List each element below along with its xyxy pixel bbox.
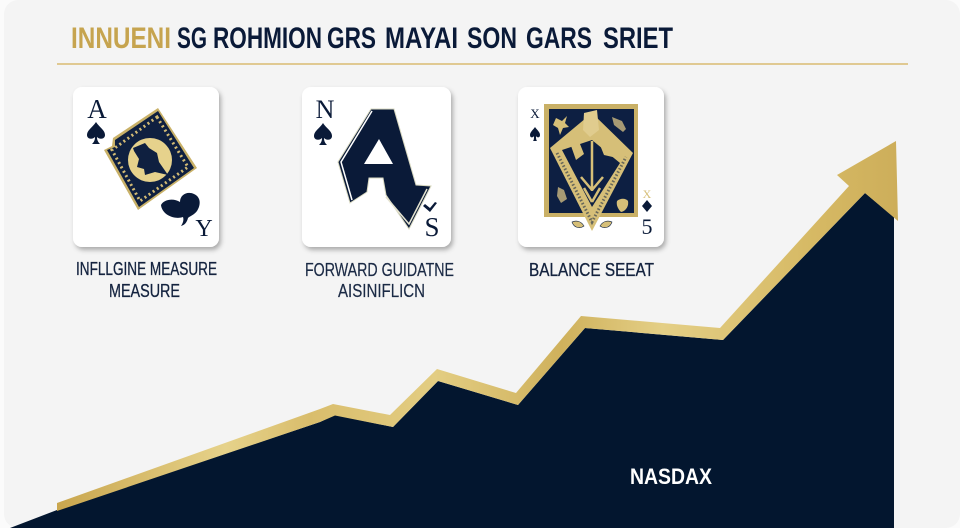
title: GRS	[327, 22, 376, 55]
title: GARS	[526, 22, 592, 55]
card 2 corner rank and spade	[314, 95, 335, 145]
card 1 corner rank and spade	[87, 94, 107, 144]
card 3 bottom corner rank and pip: X	[643, 187, 652, 201]
title: SON	[467, 22, 517, 55]
card 2 bottom rank: S	[424, 212, 440, 242]
card 3 crest emblem	[544, 104, 638, 231]
card 1 label: MEASURE	[109, 281, 180, 301]
NASDAX label: NASDAX	[630, 464, 712, 489]
card 2 label	[305, 260, 454, 301]
title: INNUENI	[71, 22, 171, 55]
title	[71, 22, 673, 55]
area chart: navy rising area	[10, 193, 894, 528]
card 2 large A emblem	[338, 109, 431, 229]
title: ROHMION	[213, 22, 322, 55]
card 1 tilted emblem	[104, 108, 197, 210]
title: MAYAI	[385, 22, 458, 55]
card 3 label: BALANCE SEEAT	[529, 260, 654, 280]
title: SG	[177, 22, 207, 55]
card 3 bottom corner rank and pip	[642, 187, 652, 239]
card 1: ace with tilted emblem	[73, 87, 219, 247]
chart arrow: gold rising line with arrowhead	[57, 141, 898, 511]
card 3 top corner rank and spade: X	[530, 106, 540, 121]
card 1 label	[76, 259, 217, 301]
card 2 bottom rank	[423, 202, 440, 242]
card 1 corner rank and spade: A	[87, 94, 107, 124]
card 2 corner rank and spade: N	[316, 95, 335, 124]
card 3: crest	[518, 87, 664, 247]
card 2: large letter A	[302, 87, 451, 247]
card 1 bottom spade blob and rank	[161, 193, 213, 242]
card 2 label: FORWARD GUIDATNE	[305, 260, 454, 280]
card 1 label: INFLLGINE MEASURE	[76, 259, 217, 279]
card 3 top corner rank and spade	[530, 106, 540, 141]
card 1 bottom spade blob and rank: Y	[195, 216, 213, 242]
card 3 bottom corner rank and pip: 5	[642, 214, 652, 239]
title: SRIET	[603, 22, 673, 55]
card 2 label: AISINIFLICN	[338, 281, 425, 301]
